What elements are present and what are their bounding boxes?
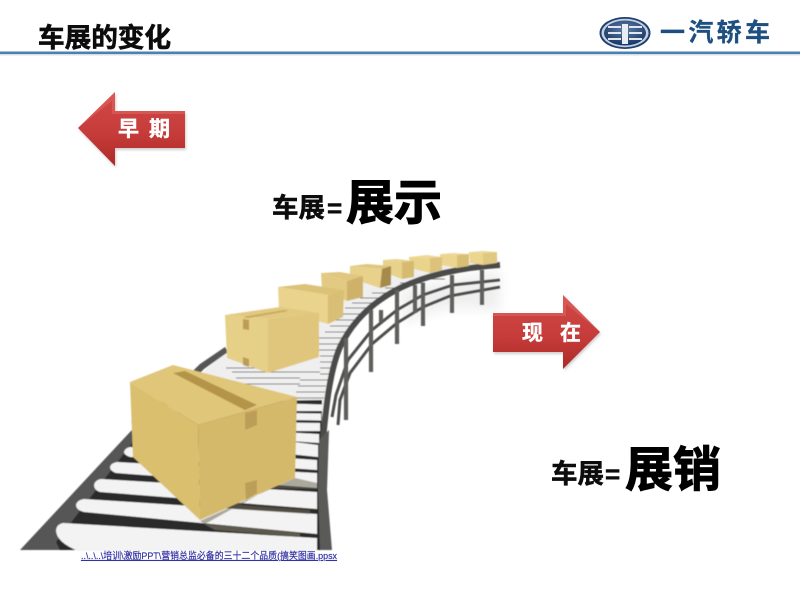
- brand name: 一汽轿车: [660, 19, 770, 47]
- box 1: large box: [130, 365, 297, 520]
- lower right rail: [318, 430, 332, 550]
- heading: auto show = display and sales: =: [605, 459, 620, 489]
- heading: auto show = display and sales: 车展: [551, 459, 604, 489]
- left rail: [20, 347, 228, 550]
- label: now: 现在: [522, 322, 581, 345]
- conveyor illustration: [20, 251, 500, 551]
- logo: FAW Car: [600, 17, 770, 49]
- box 6: [383, 259, 414, 279]
- thin roller gaps: [226, 279, 445, 398]
- header divider line: [0, 52, 800, 56]
- heading: auto show = display: [272, 177, 442, 230]
- arrow: early: [78, 92, 186, 168]
- guard rail and posts: [322, 265, 500, 450]
- box row (far to near): [130, 251, 497, 520]
- heading: auto show = display: 展示: [346, 177, 442, 230]
- hyperlink caption: ..\..\..\培训\激励PPT\营销总监必备的三十二个品质(搞笑图画.ppsx: [81, 550, 337, 562]
- heading: auto show = display and sales: 展销: [625, 444, 721, 497]
- belt: [20, 258, 498, 551]
- icon: badge: [600, 17, 650, 49]
- heading: auto show = display: 车展: [272, 193, 325, 223]
- box 3: [278, 284, 344, 324]
- arrow: now: [493, 295, 601, 371]
- rollers: [56, 404, 322, 551]
- box 8: [440, 253, 469, 268]
- box cast shadow: [200, 478, 317, 524]
- box 5: [350, 264, 391, 288]
- box 2: [225, 307, 319, 373]
- box 7: [409, 255, 442, 273]
- floor shading: [400, 270, 500, 325]
- upper belt surface: [130, 258, 498, 436]
- lower belt dark frame: [40, 400, 322, 550]
- heading: auto show = display and sales: [551, 444, 721, 497]
- label: early: 早期: [118, 118, 170, 141]
- box 4: [321, 272, 363, 301]
- box 9: [469, 251, 497, 265]
- heading: auto show = display: =: [327, 193, 342, 223]
- title: 车展的变化: [38, 23, 171, 53]
